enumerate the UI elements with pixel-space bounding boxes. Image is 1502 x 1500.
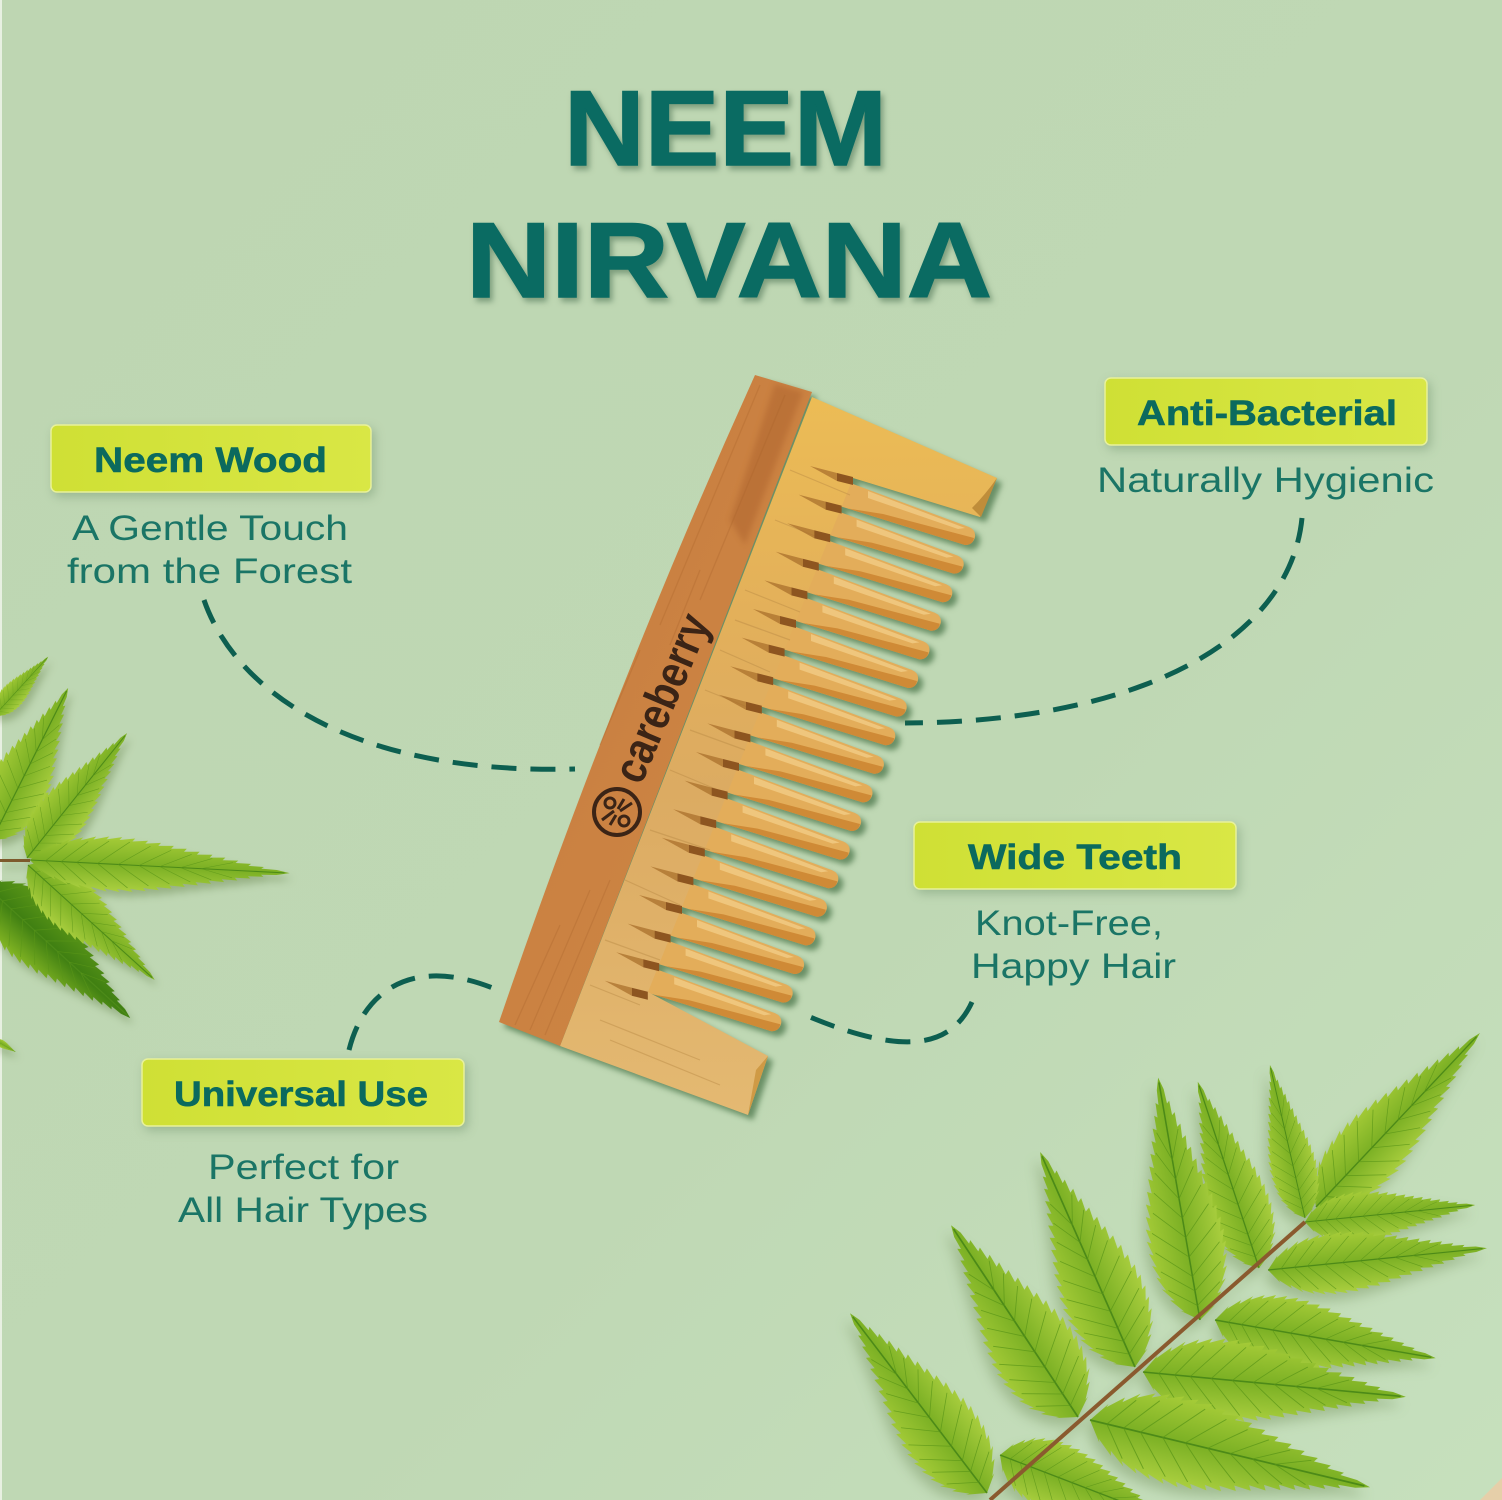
left neem sprig — [0, 648, 291, 1055]
right neem branch — [818, 1009, 1502, 1500]
callout: anti-bacterial — [1097, 378, 1434, 500]
stem — [990, 1222, 1305, 1500]
brand logo — [594, 605, 720, 835]
title line: NIRVANA: NIRVANA — [466, 200, 992, 320]
handle dark streak — [730, 384, 803, 545]
leaf — [0, 859, 154, 1044]
connector: anti-bacterial to comb — [905, 518, 1302, 723]
leaf — [10, 845, 173, 1000]
stem — [0, 859, 30, 862]
callout: universal use — [142, 1059, 464, 1230]
leaf — [1291, 1009, 1502, 1231]
pill label: Wide Teeth — [968, 838, 1182, 877]
leaf — [987, 1422, 1182, 1500]
left edge strip — [0, 0, 2, 1500]
comb slots — [605, 466, 853, 1000]
connector: neem wood to comb — [204, 600, 575, 769]
pill — [142, 1059, 464, 1126]
pill — [51, 425, 371, 492]
description: Knot-Free, — [975, 904, 1163, 943]
leaf — [1265, 1217, 1490, 1301]
pill — [1105, 378, 1427, 445]
description: A Gentle Touch — [72, 509, 348, 548]
comb teeth — [619, 472, 975, 1031]
connector: universal use to comb — [349, 976, 502, 1050]
leaf — [1303, 1180, 1478, 1247]
leaf — [914, 1201, 1115, 1441]
title — [466, 68, 992, 320]
brand name: careberry — [602, 605, 720, 790]
description: All Hair Types — [178, 1191, 428, 1230]
title line: NEEM: NEEM — [564, 68, 887, 188]
description: Happy Hair — [971, 947, 1176, 986]
leaf — [0, 674, 96, 854]
neem wood comb — [499, 375, 997, 1115]
leaf fragment — [0, 1037, 18, 1055]
leaf — [1079, 1376, 1381, 1500]
leaf — [1209, 1285, 1442, 1394]
beige corner — [1480, 1478, 1502, 1500]
pill label: Neem Wood — [94, 441, 327, 480]
comb handle band — [499, 375, 812, 1046]
leaf — [29, 832, 291, 901]
leaf — [1001, 1135, 1174, 1384]
bottom guard highlight — [748, 1056, 768, 1115]
leaf — [1167, 1072, 1290, 1278]
leaf — [818, 1289, 1019, 1500]
top guard end facet — [972, 478, 997, 517]
leaf — [7, 717, 147, 874]
leaf — [1120, 1071, 1238, 1327]
callout: neem wood — [51, 425, 371, 591]
comb body — [560, 397, 997, 1115]
pill label: Universal Use — [174, 1075, 428, 1114]
body wood grain — [590, 470, 850, 1085]
handle grain — [515, 385, 785, 1035]
description: from the Forest — [67, 552, 352, 591]
logo emblem — [594, 789, 640, 835]
callout: wide teeth — [914, 822, 1236, 986]
leaf — [1247, 1060, 1328, 1223]
leaf — [1139, 1331, 1410, 1438]
description: Perfect for — [208, 1148, 399, 1187]
pill — [914, 822, 1236, 889]
leaf — [0, 648, 58, 723]
connector: wide teeth to comb — [805, 1002, 972, 1042]
description: Naturally Hygienic — [1097, 461, 1434, 500]
pill label: Anti-Bacterial — [1137, 394, 1397, 433]
